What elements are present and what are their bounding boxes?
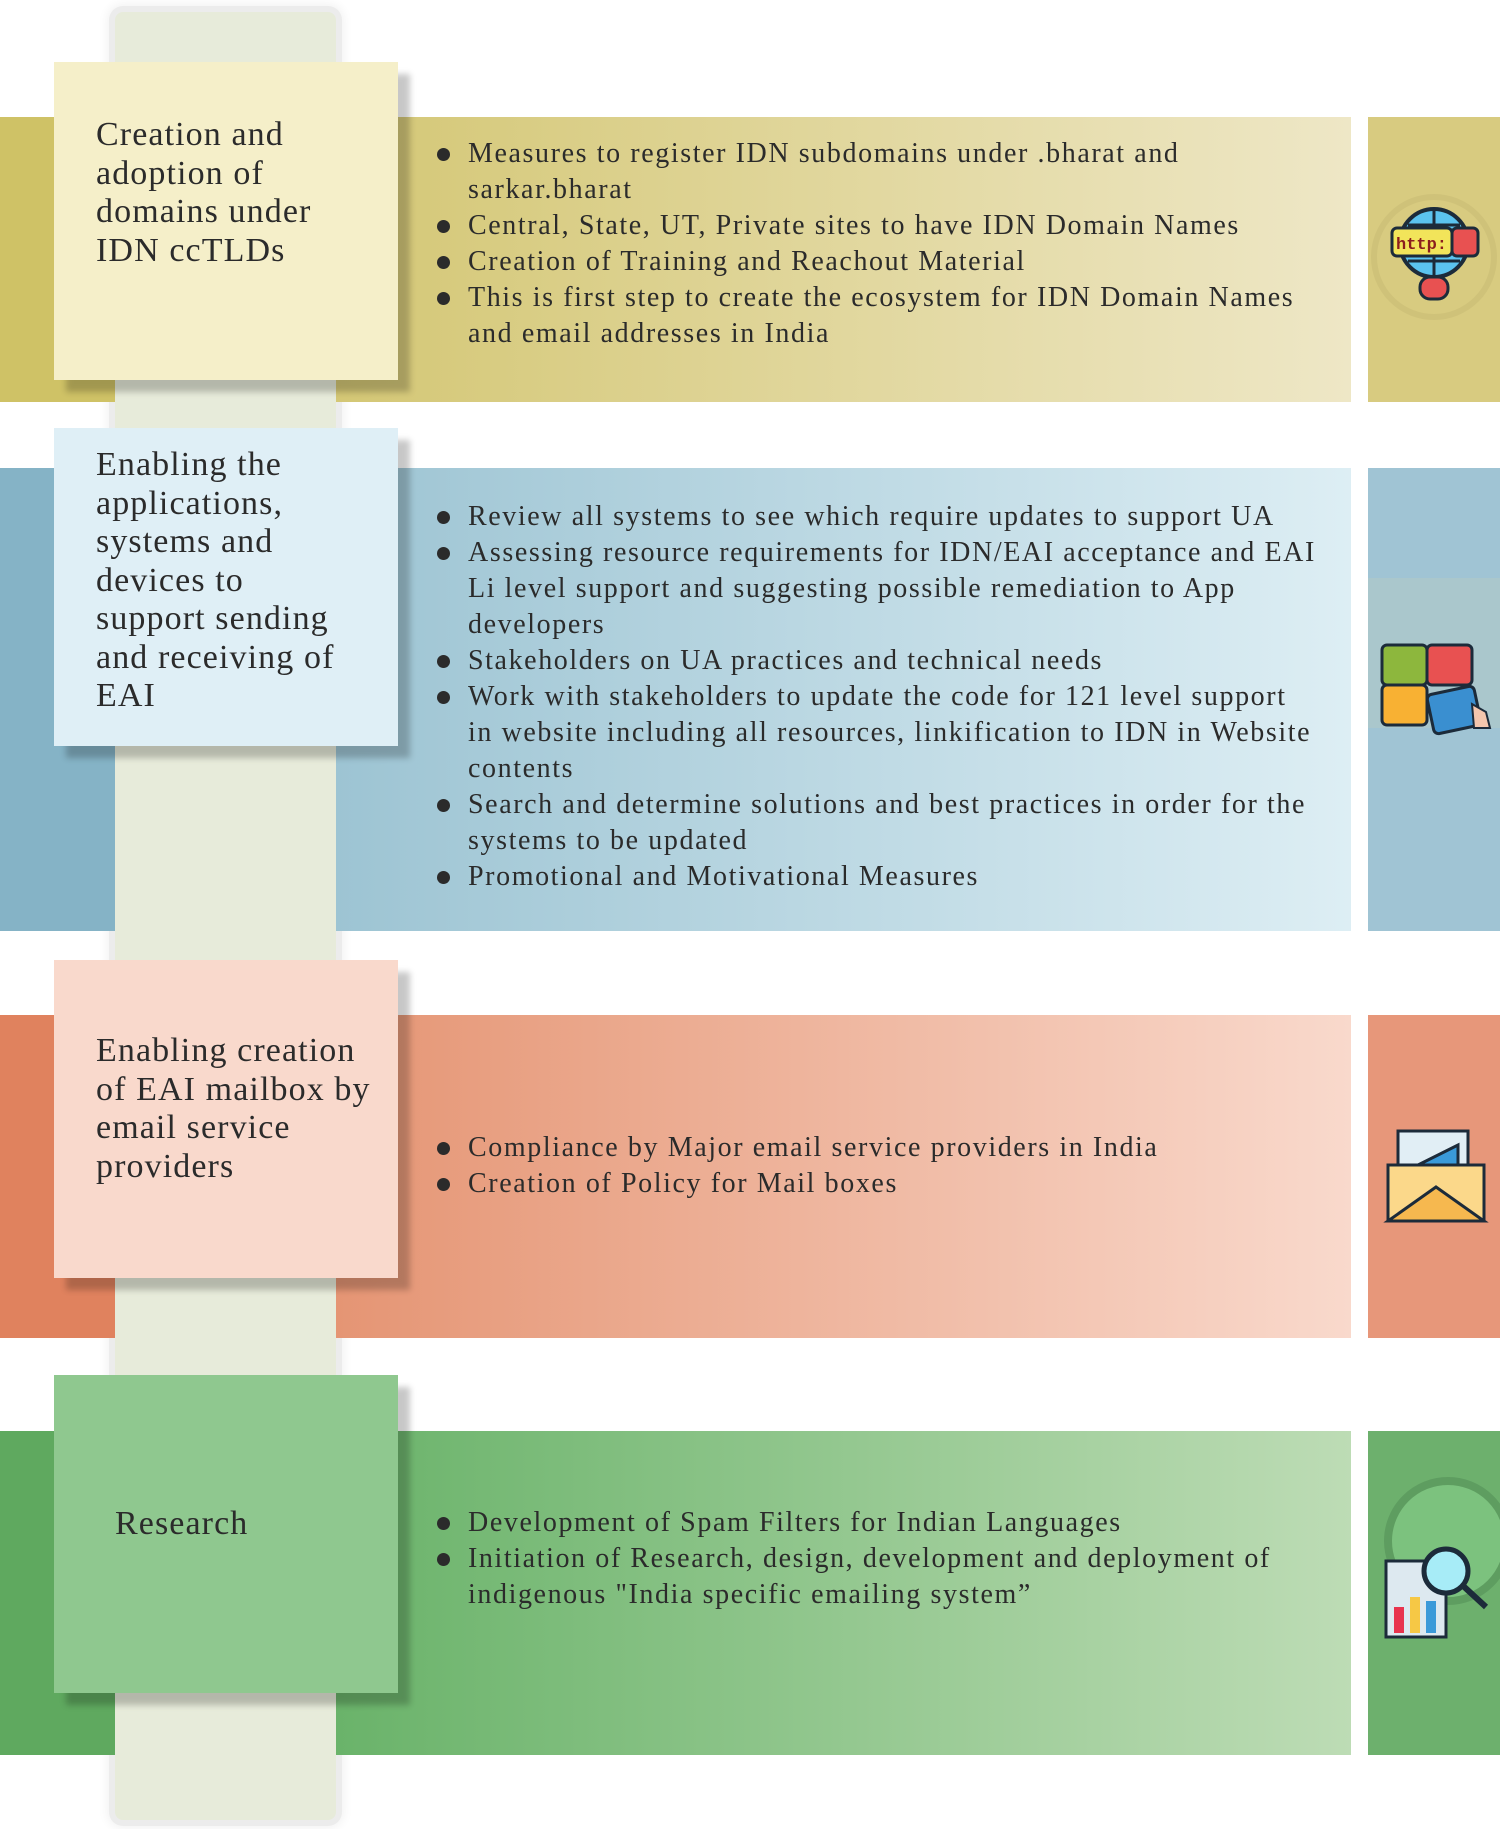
card 3: title: Enabling creation	[96, 1032, 355, 1069]
card 2: title: support sending	[96, 600, 329, 637]
list 4	[437, 1507, 1271, 1610]
list 2: in website including all resources, linkification to IDN in Website contents	[468, 717, 1311, 784]
icon: puzzle	[1368, 468, 1500, 931]
list 2: Work with stakeholders to update the code for 121 level support	[468, 681, 1287, 712]
card 3: title: providers	[96, 1148, 234, 1184]
band 3: mailbox	[0, 1015, 1500, 1338]
card 3: title: of EAI mailbox by	[96, 1070, 371, 1108]
list 4: Initiation of Research, design, development and deployment of indigenous "India specific emailing system”	[468, 1543, 1271, 1610]
icon: globe http: http:	[1396, 236, 1447, 255]
card 2: title: EAI	[96, 677, 156, 714]
card 4: title: Research	[115, 1505, 248, 1542]
icon: envelope megaphone	[1368, 1015, 1500, 1338]
list 2: Review all systems to see which require updates to support UA	[468, 501, 1275, 532]
card 2: title: and receiving of	[96, 638, 335, 676]
band 1: domains	[0, 117, 1500, 402]
card 1: title: adoption of	[96, 154, 264, 192]
list 1: Measures to register IDN subdomains under .bharat and sarkar.bharat	[468, 138, 1180, 205]
card 3: title	[54, 960, 398, 1278]
card 2: title: Enabling the	[96, 446, 282, 483]
list 2: Stakeholders on UA practices and technical needs	[468, 645, 1103, 676]
card 3: title: email service	[96, 1109, 291, 1146]
list 1: This is first step to create the ecosystem for IDN Domain Names and email addresses in India	[468, 282, 1294, 349]
list 4: Development of Spam Filters for Indian Languages	[468, 1507, 1122, 1538]
list 3: Compliance by Major email service providers in India	[468, 1132, 1158, 1163]
card 1: title: IDN ccTLDs	[96, 232, 285, 268]
list 2: Search and determine solutions and best practices in order for the systems to be updated	[468, 789, 1306, 856]
list 3: Creation of Policy for Mail boxes	[468, 1168, 898, 1199]
band 4: research	[0, 1431, 1500, 1755]
card 2: title: devices to	[96, 562, 244, 598]
list 2: Promotional and Motivational Measures	[468, 861, 979, 892]
card 2: title	[54, 428, 398, 746]
card 1: title: Creation and	[96, 116, 284, 153]
band 2: applications	[0, 468, 1500, 931]
card 4: title	[54, 1375, 398, 1693]
list 1: Central, State, UT, Private sites to have IDN Domain Names	[468, 210, 1240, 241]
list 3	[437, 1132, 1158, 1199]
list 2	[437, 501, 1316, 892]
card 1: title	[54, 62, 398, 380]
card 2: title: systems and	[96, 523, 273, 560]
icon: chart magnifier	[1368, 1431, 1500, 1755]
icon: globe http	[1368, 117, 1500, 402]
list 1: Creation of Training and Reachout Material	[468, 246, 1026, 277]
card 1: title: domains under	[96, 193, 311, 230]
vertical pillar	[115, 12, 336, 1820]
card 2: title: applications,	[96, 484, 283, 522]
list 2: Assessing resource requirements for IDN/EAI acceptance and EAI Li level support and suggesting possible remediation to App developers	[468, 537, 1316, 640]
list 1	[437, 138, 1294, 349]
